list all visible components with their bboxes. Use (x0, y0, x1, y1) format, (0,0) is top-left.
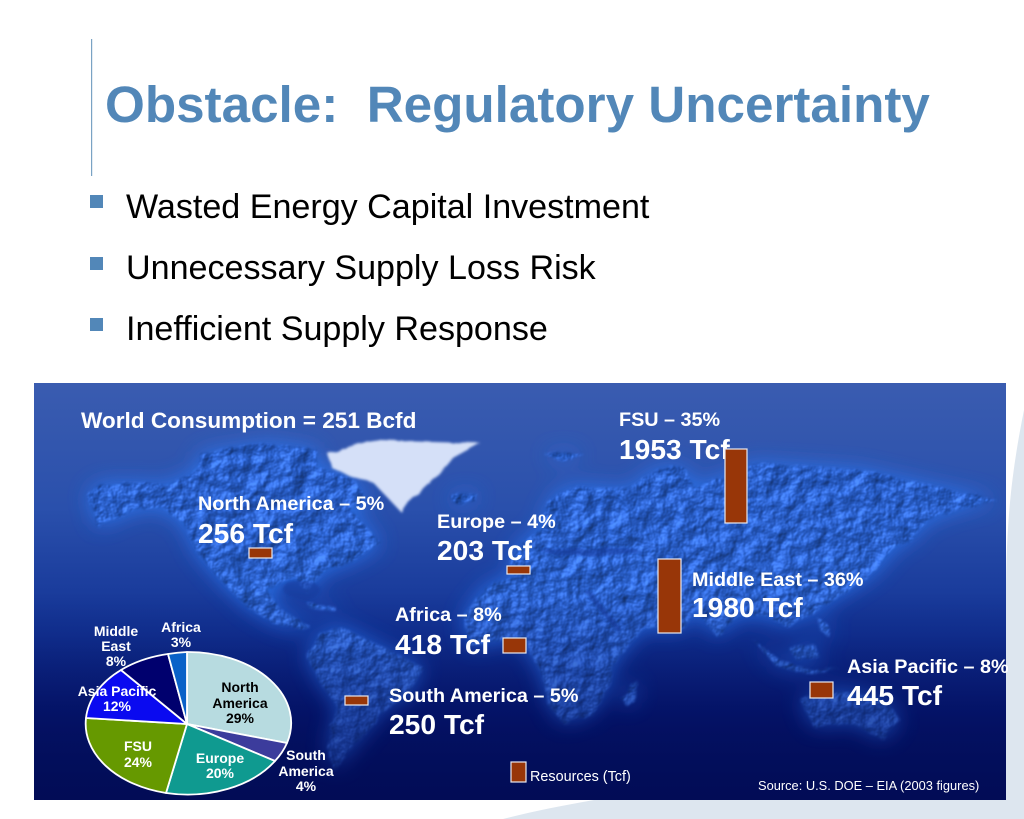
pie labels: 12% (103, 698, 132, 714)
region: South America (345, 685, 579, 740)
region: Middle East: Middle East – 36% (692, 569, 864, 591)
map continents (34, 433, 1006, 770)
slice: FSU (86, 718, 187, 793)
pie labels: Africa (161, 619, 201, 635)
bullet list (90, 188, 650, 348)
title: Obstacle: Regulatory Uncertainty (105, 76, 930, 133)
bullet 3: Inefficient Supply Response (126, 310, 548, 348)
region: Europe: 203 Tcf (437, 534, 533, 566)
region: South America: South America – 5% (389, 685, 579, 707)
pie labels: 4% (296, 778, 317, 794)
region: Africa (395, 604, 526, 660)
region: Middle East (658, 559, 864, 633)
pie labels: 29% (226, 710, 255, 726)
title accent line (91, 39, 92, 176)
region: Asia Pacific (810, 656, 1009, 711)
panel: world map (34, 383, 1009, 800)
region: Asia Pacific: 445 Tcf (847, 679, 943, 711)
legend: resources (511, 762, 631, 785)
slice: Europe (166, 724, 275, 795)
region: South America: 250 Tcf (389, 708, 485, 740)
bullet 2: Unnecessary Supply Loss Risk (126, 249, 597, 287)
region: Middle East: 1980 Tcf (692, 591, 803, 623)
slice: South America (187, 724, 287, 761)
pie labels: Asia Pacific (78, 683, 157, 699)
pie labels: East (101, 638, 131, 654)
region: North America (198, 493, 385, 558)
background corner swoosh (503, 410, 1024, 819)
bullet 1: Wasted Energy Capital Investment (126, 188, 650, 226)
region: Europe (437, 511, 556, 574)
region: North America: 256 Tcf (198, 517, 294, 549)
region: Asia Pacific: Asia Pacific – 8% (847, 656, 1009, 678)
legend: resources: Resources (Tcf) (530, 769, 631, 785)
pie chart (86, 652, 291, 795)
pie labels: 8% (106, 653, 127, 669)
slice: Middle East (121, 654, 187, 724)
map ocean background (34, 383, 1006, 800)
slice: North America (187, 652, 291, 743)
slice: Africa (168, 652, 187, 724)
pie labels (78, 619, 334, 794)
region: FSU: 1953 Tcf (619, 433, 730, 465)
pie labels: South (286, 747, 326, 763)
pie labels: 3% (171, 634, 192, 650)
source note: Source: U.S. DOE – EIA (2003 figures) (758, 778, 979, 793)
slice: Asia Pacific (86, 670, 187, 724)
region: FSU (619, 409, 747, 523)
pie labels: 24% (124, 754, 153, 770)
region: FSU: FSU – 35% (619, 409, 721, 431)
pie labels: 20% (206, 765, 235, 781)
pie labels: FSU (124, 738, 152, 754)
region: Africa: Africa – 8% (395, 604, 502, 626)
pie labels: America (278, 763, 334, 779)
pie labels: North (221, 679, 259, 695)
world consumption label: World Consumption = 251 Bcfd (81, 408, 416, 433)
pie labels: America (212, 695, 268, 711)
region: North America: North America – 5% (198, 493, 385, 515)
region: Africa: 418 Tcf (395, 628, 491, 660)
pie labels: Middle (94, 623, 138, 639)
pie labels: Europe (196, 750, 244, 766)
region: Europe: Europe – 4% (437, 511, 556, 533)
